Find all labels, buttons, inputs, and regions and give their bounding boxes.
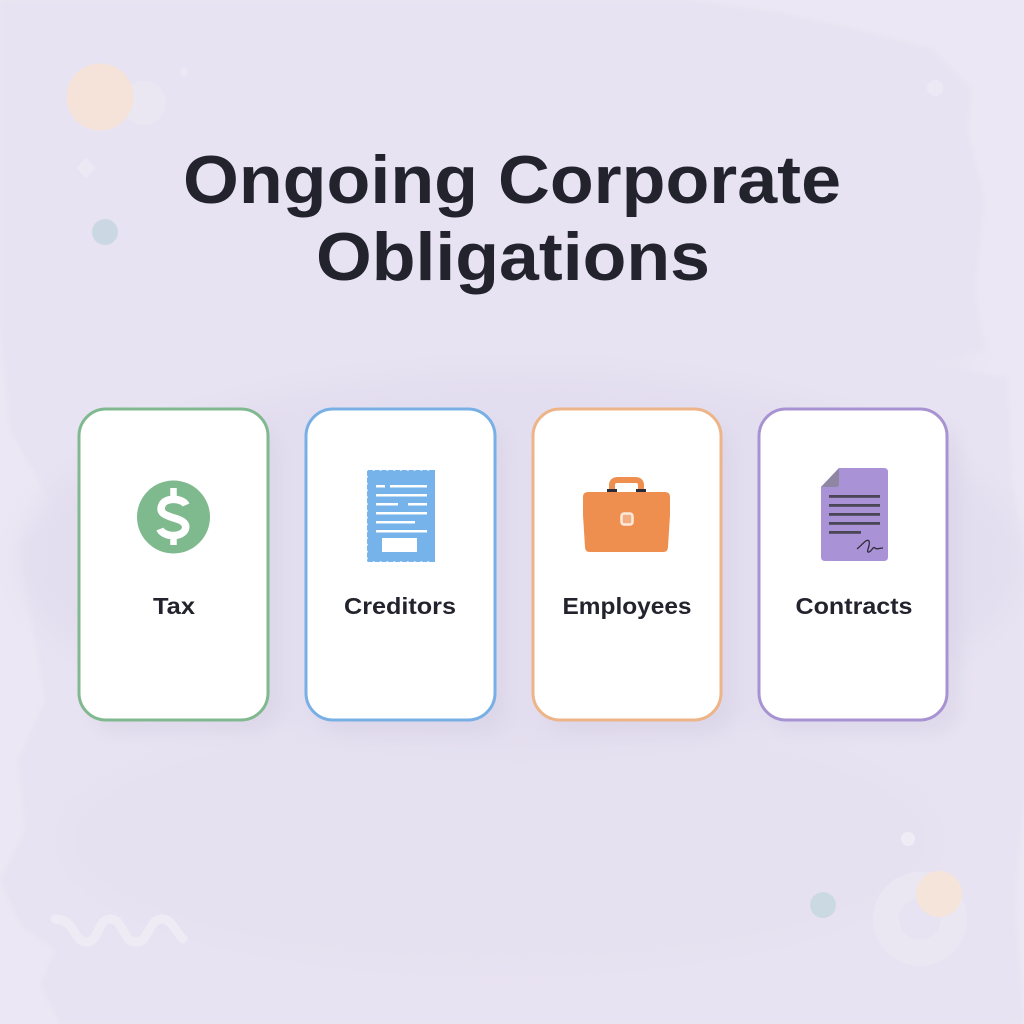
panel: tax <box>79 409 280 734</box>
panel: employees <box>533 409 734 734</box>
decoration: top-right dot <box>927 80 943 96</box>
title <box>183 142 841 295</box>
title: Ongoing Corporate <box>183 142 841 218</box>
decoration: top-left circles <box>66 64 188 245</box>
panel: contracts <box>759 409 960 734</box>
icon: dollar coin <box>137 480 210 554</box>
icon: receipt <box>366 470 435 562</box>
label: tax: Tax <box>153 593 195 619</box>
title: Obligations <box>316 219 710 295</box>
label: contracts: Contracts <box>796 593 912 619</box>
decoration: bottom-right circles <box>810 832 967 966</box>
icon: briefcase <box>583 480 670 552</box>
icon: signed contract <box>821 468 888 561</box>
label: creditors: Creditors <box>344 593 456 619</box>
decoration: squiggle <box>55 919 183 942</box>
label: employees: Employees <box>562 593 692 619</box>
panel: creditors <box>306 409 507 734</box>
